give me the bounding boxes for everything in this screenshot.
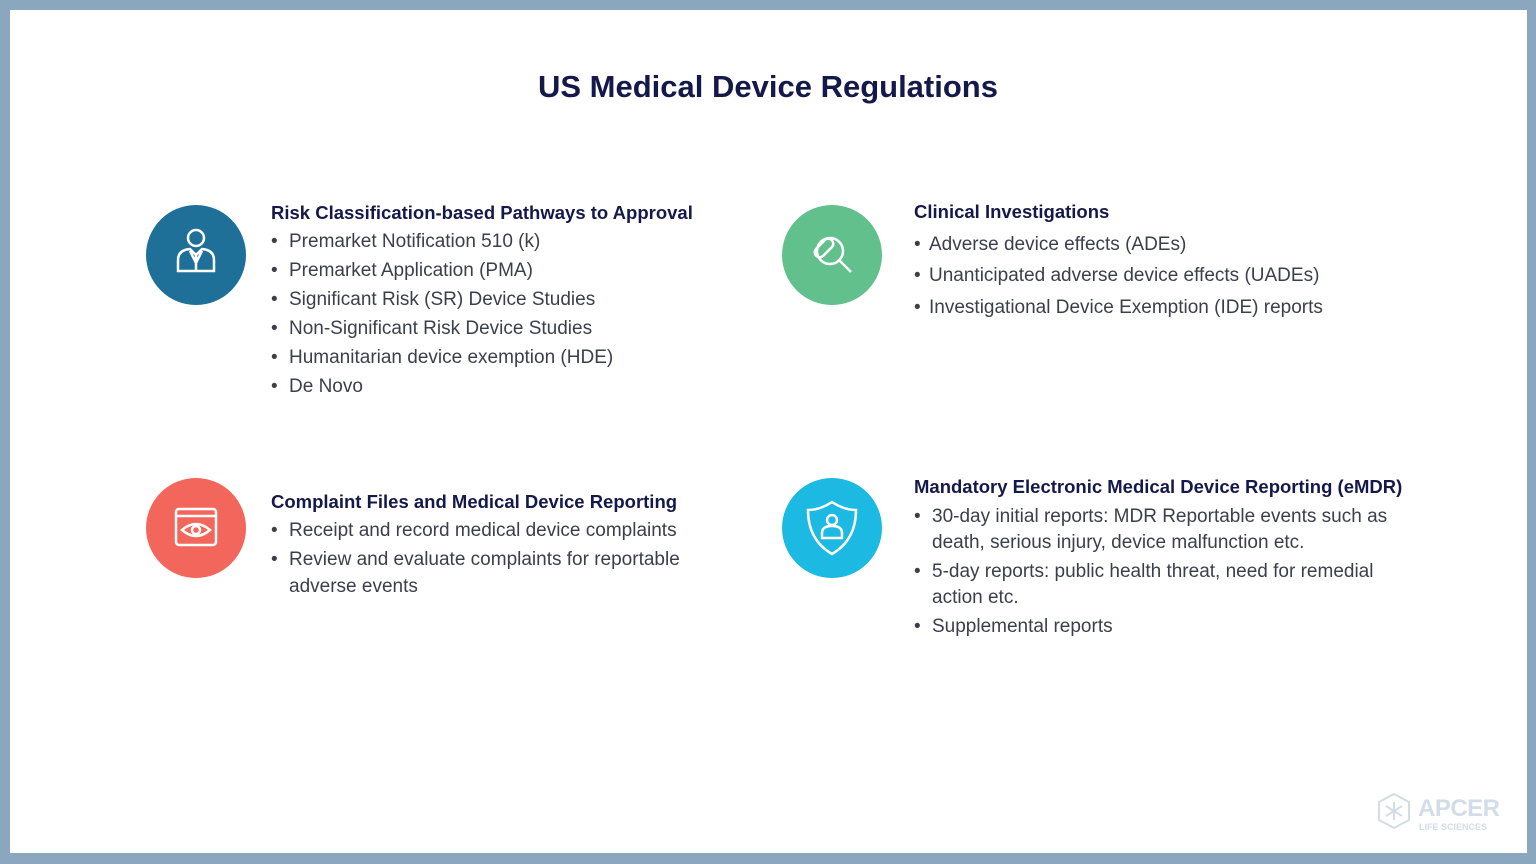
icon: magnifier pill [782,205,882,305]
title: US Medical Device Regulations [538,69,998,104]
panel: eMDR: Supplemental reports [932,616,1113,637]
panel: clinical investigations: Investigational Device Exemption (IDE) reports [929,296,1323,318]
logo [1378,793,1500,832]
panel: complaint files: Complaint Files and Medical Device Reporting [271,491,677,512]
panel: clinical investigations: Clinical Investigations [914,201,1109,222]
icon: eye screen [146,478,246,578]
panel: eMDR: 5-day reports: public health threat, need for remedial [932,561,1373,582]
panel: eMDR: 30-day initial reports: MDR Reportable events such as [932,506,1387,527]
icon: shield person [782,478,882,578]
panel: eMDR: Mandatory Electronic Medical Device Reporting (eMDR) [914,476,1402,497]
panel: clinical investigations: Unanticipated adverse device effects (UADEs) [929,265,1319,286]
panel: eMDR: death, serious injury, device malfunction etc. [932,532,1304,553]
panel: risk classification: De Novo [289,376,363,397]
panel: complaint files: Review and evaluate complaints for reportable [289,549,680,570]
panel: risk classification: Premarket Application (PMA) [289,260,533,281]
panel: risk classification: Humanitarian device exemption (HDE) [289,347,613,368]
panel: clinical investigations: Adverse device effects (ADEs) [929,234,1186,254]
logo: APCER [1418,795,1500,822]
panel: complaint files: adverse events [289,576,418,597]
panel: eMDR: action etc. [932,587,1019,608]
panel: eMDR [914,476,1402,637]
logo: LIFE SCIENCES [1419,822,1487,832]
icon: person [146,205,246,305]
panel: complaint files [271,491,680,597]
panel: risk classification: Premarket Notification 510 (k) [289,231,540,252]
panel: clinical investigations [914,201,1323,318]
panel: risk classification: Non-Significant Risk Device Studies [289,318,592,339]
panel: risk classification: Significant Risk (SR) Device Studies [289,289,595,310]
panel: risk classification: Risk Classification-based Pathways to Approval [271,202,693,223]
panel: complaint files: Receipt and record medical device complaints [289,520,677,541]
panel: risk classification [271,202,693,397]
